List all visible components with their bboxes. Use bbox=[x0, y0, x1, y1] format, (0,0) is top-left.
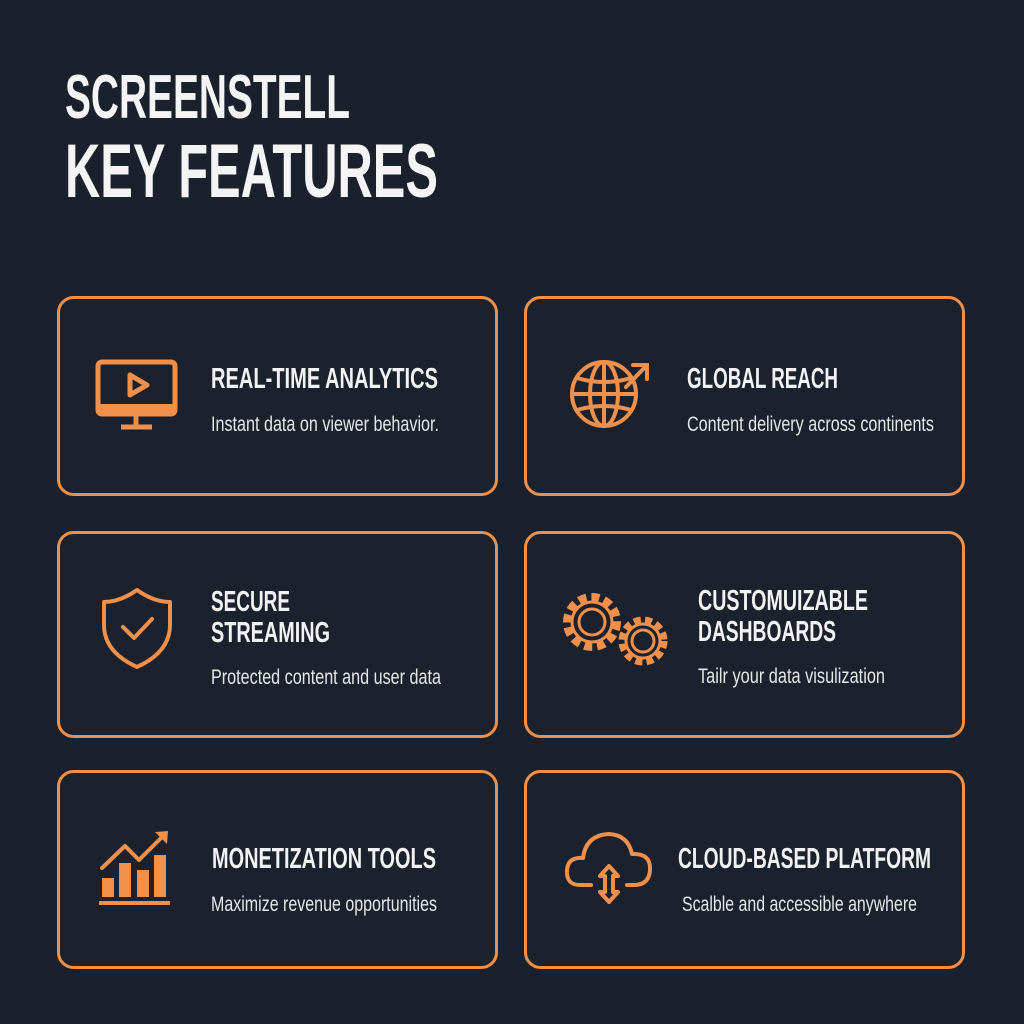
panel: real-time analytics bbox=[58, 298, 496, 494]
panel: customizable dashboards: DASHBOARDS bbox=[698, 616, 836, 648]
icon: globe bbox=[572, 362, 647, 426]
description: Protected content and user data bbox=[211, 666, 441, 689]
icon: shield bbox=[104, 590, 170, 667]
description: Tailr your data visulization bbox=[698, 665, 885, 688]
icon: monitor bbox=[98, 362, 175, 427]
title bbox=[65, 63, 438, 214]
panel: customizable dashboards bbox=[526, 532, 964, 736]
title: KEY FEATURES bbox=[65, 129, 438, 214]
panel: secure streaming: STREAMING bbox=[211, 617, 330, 649]
description: Content delivery across continents bbox=[687, 413, 934, 436]
title: SCREENSTELL bbox=[65, 63, 350, 132]
icon: cloud bbox=[567, 834, 650, 902]
description: Maximize revenue opportunities bbox=[211, 893, 437, 916]
heading: GLOBAL REACH bbox=[687, 363, 838, 395]
description: Scalble and accessible anywhere bbox=[682, 893, 917, 916]
heading: MONETIZATION TOOLS bbox=[212, 843, 436, 875]
panel: monetization tools bbox=[58, 772, 496, 968]
heading: SECURE bbox=[211, 586, 290, 618]
panel: secure streaming bbox=[58, 532, 496, 736]
icon: bar chart bbox=[99, 831, 170, 905]
heading: CUSTOMUIZABLE bbox=[698, 585, 868, 617]
panel: global reach bbox=[526, 298, 964, 494]
icon: gears bbox=[567, 597, 664, 662]
heading: REAL-TIME ANALYTICS bbox=[211, 363, 438, 395]
panel: cloud-based platform bbox=[526, 772, 964, 968]
description: Instant data on viewer behavior. bbox=[211, 413, 439, 436]
